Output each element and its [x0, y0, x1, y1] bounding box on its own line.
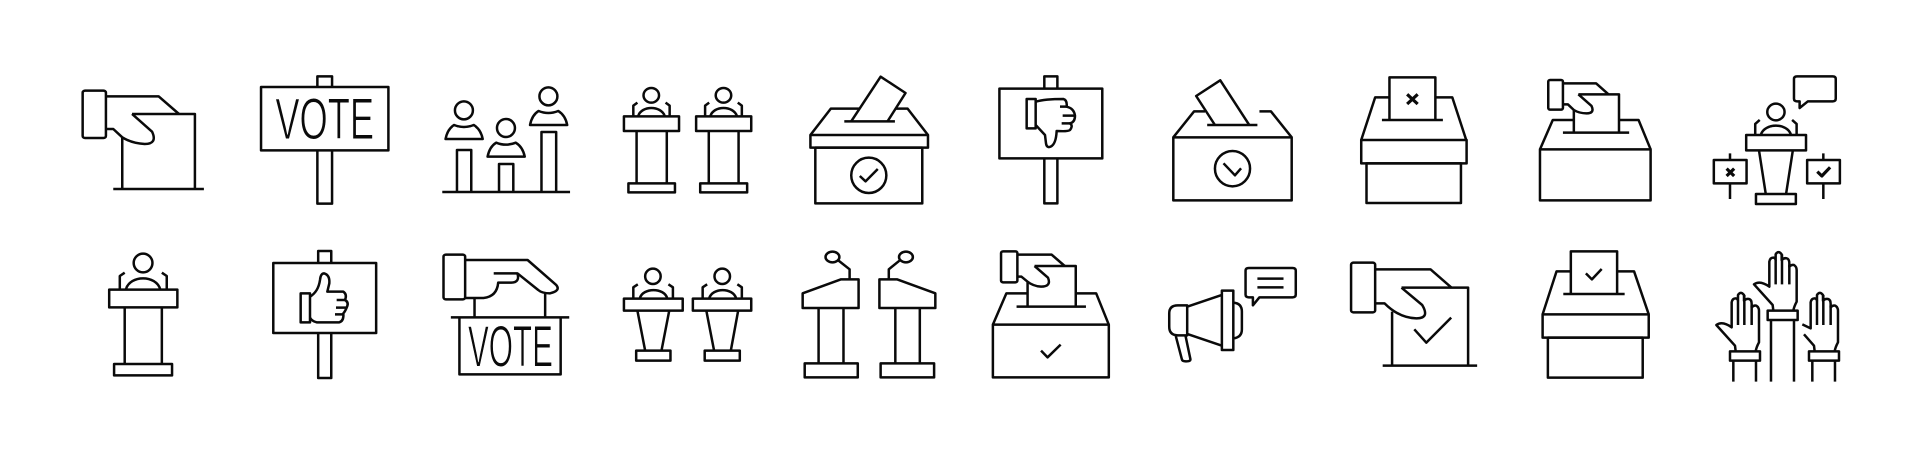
icon: ballot box with chevron in circle [1173, 80, 1292, 200]
icon: thumbs down placard [999, 76, 1102, 203]
icon: ballot box with checked paper [1543, 251, 1649, 378]
icon: large speaker at podium [109, 254, 177, 375]
icon: hand dropping paper in checked ballot box [993, 251, 1109, 377]
icon: hand casting checked ballot [1351, 263, 1477, 366]
icon: ballot box with crossed paper [1361, 77, 1467, 203]
icon: speaker at tapered lectern, left of pair [624, 269, 683, 361]
icon: speaker with speech bubble and yes/no signs [1714, 76, 1840, 204]
icon: hand casting ballot on a base line [83, 91, 204, 189]
icon: speaker at tapered lectern, right of pair [693, 269, 751, 361]
icon: hand dropping paper in ballot box [1540, 80, 1651, 200]
icon: speaker at podium, right of pair [696, 88, 751, 192]
icon: hand casting ballot in VOTE box: VOTE [468, 314, 553, 379]
icon: megaphone with speech bubble [1169, 268, 1296, 361]
icon: VOTE placard [261, 76, 388, 204]
icon: three candidates on poll bars [442, 87, 570, 192]
icon: speaker at podium, left of pair [624, 88, 679, 192]
icon: three raised hands [1716, 252, 1839, 382]
icon: VOTE placard: VOTE [275, 86, 374, 152]
icon: thumbs up placard [273, 251, 376, 378]
icon: hand casting ballot in VOTE box [444, 255, 569, 379]
icon: two debate lecterns with microphones [803, 252, 935, 377]
icon: thumbs down hand [1027, 99, 1075, 147]
icon: thumbs up hand [301, 273, 348, 322]
icon: ballot box with check in circle [810, 77, 928, 203]
